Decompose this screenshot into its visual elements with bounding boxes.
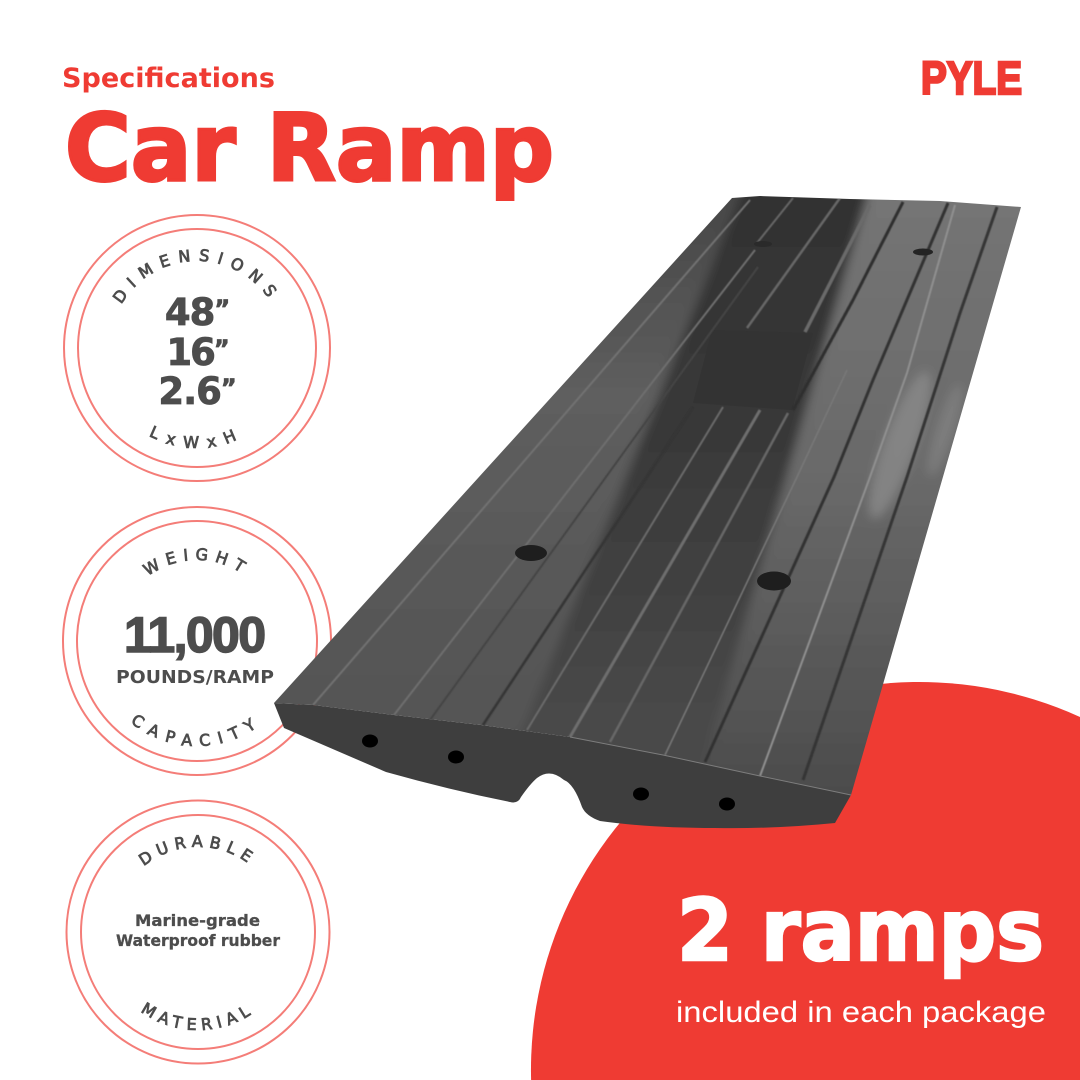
grooves xyxy=(313,198,997,780)
badge: weight capacity: CAPACITY xyxy=(132,715,254,746)
badge: dimensions: DIMENSIONS xyxy=(112,248,277,304)
badge: dimensions: ” xyxy=(221,374,236,402)
badge: durable material: MATERIAL xyxy=(141,1002,252,1030)
badge: dimensions: 2.6 xyxy=(158,370,221,413)
callout: 2 ramps: 2 ramps xyxy=(677,881,1044,981)
badge: weight capacity: 11,000 xyxy=(124,607,266,663)
badge: durable material: DURABLE xyxy=(138,834,254,866)
badge: dimensions xyxy=(63,214,331,482)
badge: dimensions: 48 xyxy=(165,291,214,334)
red quarter circle background xyxy=(531,682,1080,1080)
badge: weight capacity: WEIGHT xyxy=(142,548,248,575)
center dark patch xyxy=(693,330,813,410)
front face holes xyxy=(362,734,735,810)
top surface mounting holes xyxy=(515,241,933,590)
callout subtext: included in each package xyxy=(676,996,1046,1029)
badge: durable material: Waterproof rubber xyxy=(116,931,280,950)
product image: rubber car ramp xyxy=(274,196,1021,828)
badge: weight capacity: POUNDS/RAMP xyxy=(116,667,274,688)
front edge highlight xyxy=(570,737,851,795)
badge: durable material: Marine-grade xyxy=(135,911,260,930)
badge: dimensions: LxWxH xyxy=(150,425,236,448)
logo: PYLE: PYLE xyxy=(921,52,1022,104)
ramp front face xyxy=(274,703,851,828)
badge: durable material xyxy=(66,800,330,1064)
badge: weight capacity xyxy=(62,506,332,776)
badge: dimensions: ” xyxy=(214,295,229,323)
badge: dimensions: ” xyxy=(214,335,228,363)
title: Car Ramp: Car Ramp xyxy=(65,94,554,202)
ramp top surface xyxy=(274,196,1021,795)
heading: Specifications: Specifications xyxy=(62,63,275,94)
badge: dimensions: 16 xyxy=(166,331,214,374)
